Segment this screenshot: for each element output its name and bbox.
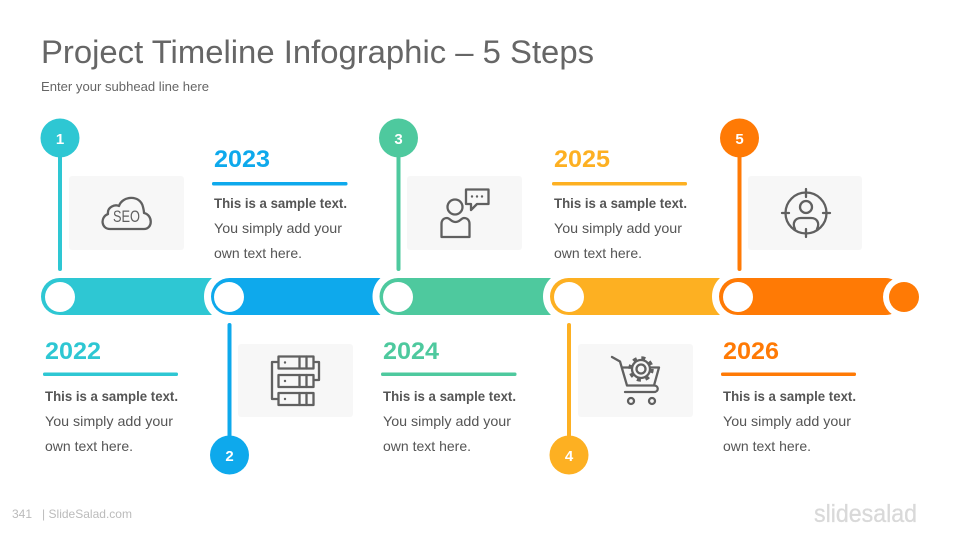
footer: page number and site: 341 | SlideSalad.com: [12, 507, 132, 521]
step 2 pin: [210, 323, 249, 474]
text block: 2022: [43, 338, 178, 454]
card: SEO cloud icon: SEO: [113, 207, 140, 226]
text block: 2026: 2026: [723, 338, 779, 365]
text block: 2023: own text here.: [214, 245, 302, 261]
text block: 2026: This is a sample text.: [723, 388, 856, 404]
footer: logo wordmark: slidesalad: [814, 500, 917, 528]
text block: 2022: own text here.: [45, 438, 133, 454]
step 3 pin: [379, 118, 418, 271]
text block: 2023: [212, 146, 348, 261]
text block: 2026: You simply add your: [723, 413, 851, 429]
card: SEO cloud icon: [69, 176, 184, 250]
text block: 2026: own text here.: [723, 438, 811, 454]
text block: 2024: You simply add your: [383, 413, 511, 429]
text block: 2025: This is a sample text.: [554, 195, 687, 211]
card: server stack icon: [238, 344, 353, 417]
text block: 2022: You simply add your: [45, 413, 173, 429]
card: person with speech bubble icon: [407, 176, 522, 250]
step 5 pin: [720, 118, 759, 271]
step 4 pin: [550, 323, 588, 474]
card: shopping cart with gear icon: [578, 344, 693, 417]
text block: 2024: This is a sample text.: [383, 388, 516, 404]
text block: 2024: own text here.: [383, 438, 471, 454]
text block: 2023: This is a sample text.: [214, 195, 347, 211]
step 4 pin: 4: [565, 448, 574, 465]
step 2 pin: 2: [225, 448, 234, 465]
step 1 pin: [40, 118, 80, 271]
subhead: Enter your subhead line here: [41, 80, 209, 94]
title: Project Timeline Infographic – 5 Steps: [41, 34, 594, 70]
step 1 pin: 1: [56, 131, 64, 148]
text block: 2022: This is a sample text.: [45, 388, 178, 404]
text block: 2023: 2023: [214, 146, 270, 173]
text block: 2024: [381, 338, 516, 454]
text block: 2024: 2024: [383, 338, 440, 365]
text block: 2023: You simply add your: [214, 220, 342, 236]
text block: 2022: 2022: [45, 338, 101, 365]
text block: 2025: You simply add your: [554, 220, 682, 236]
timeline bar: [41, 276, 925, 318]
step 3 pin: 3: [394, 131, 403, 148]
text block: 2025: 2025: [554, 146, 610, 173]
card: target person icon: [748, 176, 862, 250]
step 5 pin: 5: [735, 131, 744, 148]
text block: 2026: [721, 338, 856, 454]
text block: 2025: [552, 146, 687, 261]
text block: 2025: own text here.: [554, 245, 642, 261]
